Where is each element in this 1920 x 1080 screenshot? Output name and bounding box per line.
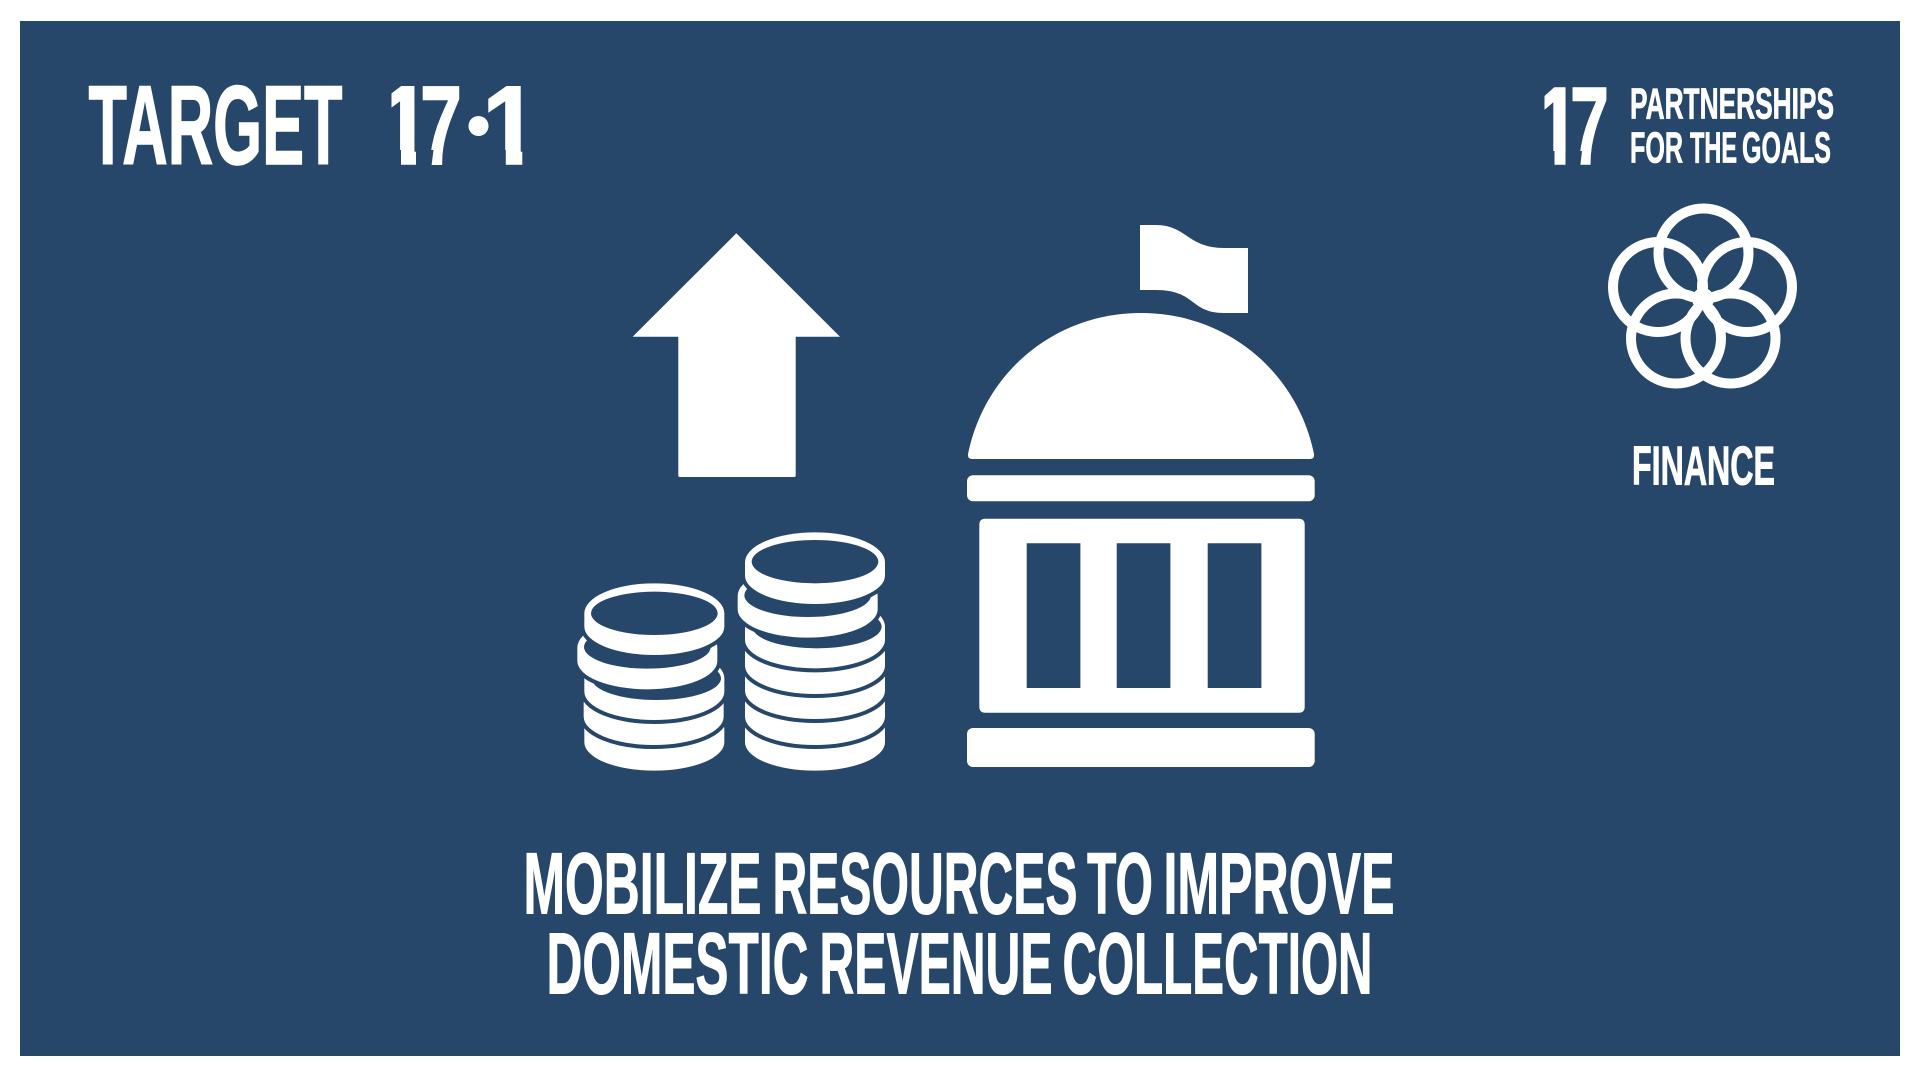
goal label: 17 partnerships for the goals: GOALS [1742,124,1831,173]
label: finance: FINANCE [1632,434,1775,496]
goal label: 17 partnerships for the goals: 7 [1570,65,1609,188]
goal label: 17 partnerships for the goals: 1 [1535,65,1580,188]
heading: target description: COLLECTION [1062,914,1372,1012]
goal label: 17 partnerships for the goals: THE [1690,124,1737,173]
icon: domed government building [967,225,1315,767]
title: target number: 1 [378,63,432,188]
title: target number: 7 [420,63,462,188]
left coin stack [577,583,724,771]
lower bar [967,728,1315,767]
heading: target description: DOMESTIC [546,914,808,1012]
goal label: 17 partnerships for the goals: FOR [1630,124,1683,173]
title: target number: TARGET [88,63,342,188]
building body with windows [979,519,1305,713]
flag [1140,225,1248,313]
dome [968,313,1314,459]
heading: target description [524,834,1394,1012]
heading: target description: REVENUE [820,914,1052,1012]
heading: target description: RESOURCES [772,834,1078,932]
goal label: 17 partnerships for the goals [1528,65,1834,188]
icon: coin stacks [577,532,885,771]
upper bar [967,475,1315,501]
title: target number: 1 [482,63,539,188]
icon: five interlocking rings [1613,208,1792,384]
right coin stack [738,532,885,771]
heading: target description: IMPROVE [1164,834,1394,932]
icon: up arrow [633,233,840,477]
heading: target description: MOBILIZE [524,834,762,932]
heading: target description: TO [1087,834,1153,932]
